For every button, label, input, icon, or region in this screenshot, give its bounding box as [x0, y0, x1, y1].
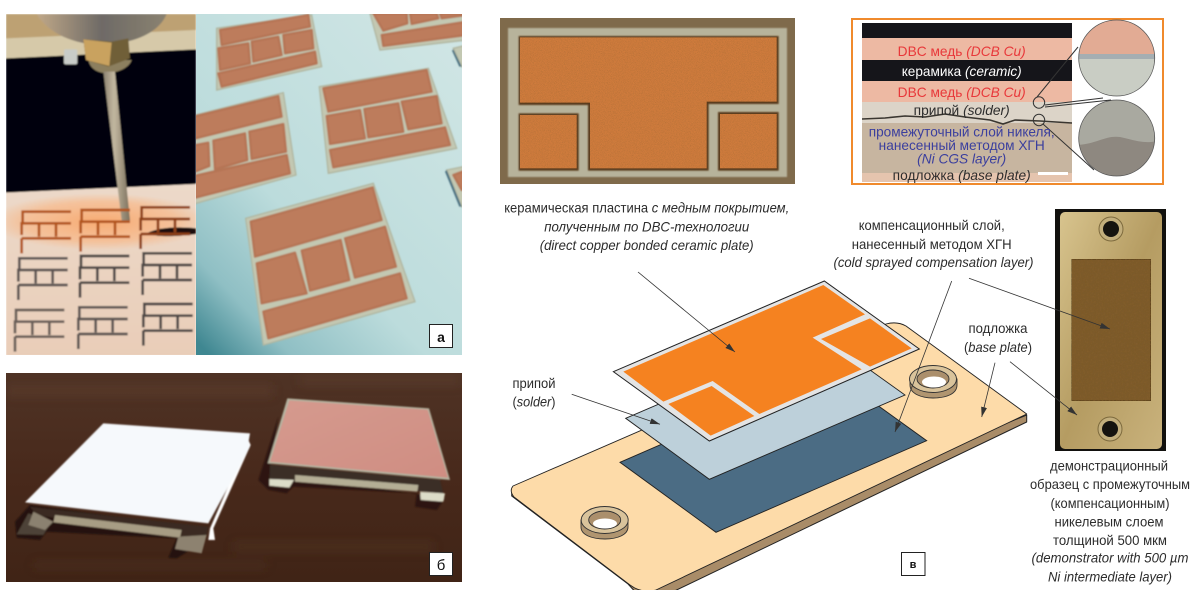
- orange frame: [852, 19, 1163, 184]
- base plate: [511, 323, 1027, 590]
- heading: compensation layer caption: нанесенный методом ХГН: [852, 237, 1012, 252]
- micrograph labels: нанесенный методом ХГН: [879, 138, 1045, 153]
- text: demonstrator caption: демонстрационный: [1050, 459, 1168, 474]
- label: b: [430, 552, 452, 576]
- heading: copper plate caption: [504, 201, 789, 253]
- arrows: [572, 272, 1110, 432]
- photo: demonstrator sample: [1055, 209, 1166, 451]
- ring: left mounting boss: [581, 506, 628, 539]
- photo: cold spray nozzle over plates: [0, 14, 210, 356]
- compensation layer: [620, 371, 927, 532]
- text: demonstrator caption: [1030, 459, 1190, 585]
- ring: right mounting boss: [910, 366, 957, 398]
- heading: base plate caption: [964, 321, 1032, 355]
- micrograph labels: [869, 44, 1055, 183]
- wood table background: [6, 373, 462, 582]
- photo: plates with copper pattern: [187, 13, 467, 355]
- label: solder: припой: [512, 376, 556, 391]
- text: demonstrator caption: Ni intermediate layer): [1048, 570, 1172, 585]
- text: demonstrator caption: толщиной 500 мкм: [1053, 533, 1167, 548]
- heading: copper plate caption: керамическая пластина с медным покрытием,: [504, 201, 789, 216]
- heading: compensation layer caption: компенсационный слой,: [859, 218, 1005, 233]
- label: v: [902, 552, 925, 576]
- heading: compensation layer caption: (cold sprayed compensation layer): [834, 255, 1034, 270]
- text: demonstrator caption: (компенсационным): [1050, 496, 1170, 511]
- label: a: а: [437, 329, 445, 345]
- ceramic plate with copper: [613, 281, 919, 441]
- micrograph labels: DBC медь (DCB Cu): [898, 44, 1026, 59]
- white module: [15, 423, 251, 558]
- heading: copper plate caption: (direct copper bonded ceramic plate): [540, 238, 754, 253]
- micrograph labels: (Ni CGS layer): [917, 152, 1006, 166]
- heading: compensation layer caption: [834, 218, 1034, 270]
- panel: cross-section micrograph: [852, 18, 1163, 184]
- micrograph labels: припой (solder): [914, 103, 1010, 118]
- pink module: [258, 398, 450, 510]
- label: solder: (solder): [512, 395, 556, 410]
- heading: copper plate caption: полученным по DBC-технологии: [544, 220, 750, 235]
- label: solder: [512, 376, 556, 410]
- heading: base plate caption: подложка: [968, 321, 1028, 336]
- micrograph zoom circles: [1033, 18, 1160, 180]
- heading: base plate caption: (base plate): [964, 340, 1032, 355]
- text: demonstrator caption: никелевым слоем: [1054, 515, 1164, 530]
- exploded layer diagram: [511, 281, 1027, 590]
- panel a: photographs of printed plates: [0, 13, 467, 356]
- micrograph labels: керамика (ceramic): [902, 64, 1022, 79]
- label: v: в: [910, 559, 917, 571]
- micrograph layers: [862, 23, 1072, 182]
- label: b: б: [437, 557, 445, 574]
- micrograph labels: подложка (base plate): [893, 168, 1031, 183]
- panel b: photo of assembled modules on wood: [6, 373, 462, 582]
- photo: ceramic plate with copper pattern: [500, 18, 795, 184]
- text: demonstrator caption: образец с промежуточным: [1030, 477, 1190, 492]
- micrograph labels: DBC медь (DCB Cu): [898, 85, 1026, 100]
- micrograph labels: промежуточный слой никеля,: [869, 125, 1055, 140]
- solder layer: [626, 335, 905, 479]
- text: demonstrator caption: (demonstrator with 500 µm: [1032, 551, 1188, 566]
- label: a: [430, 324, 452, 348]
